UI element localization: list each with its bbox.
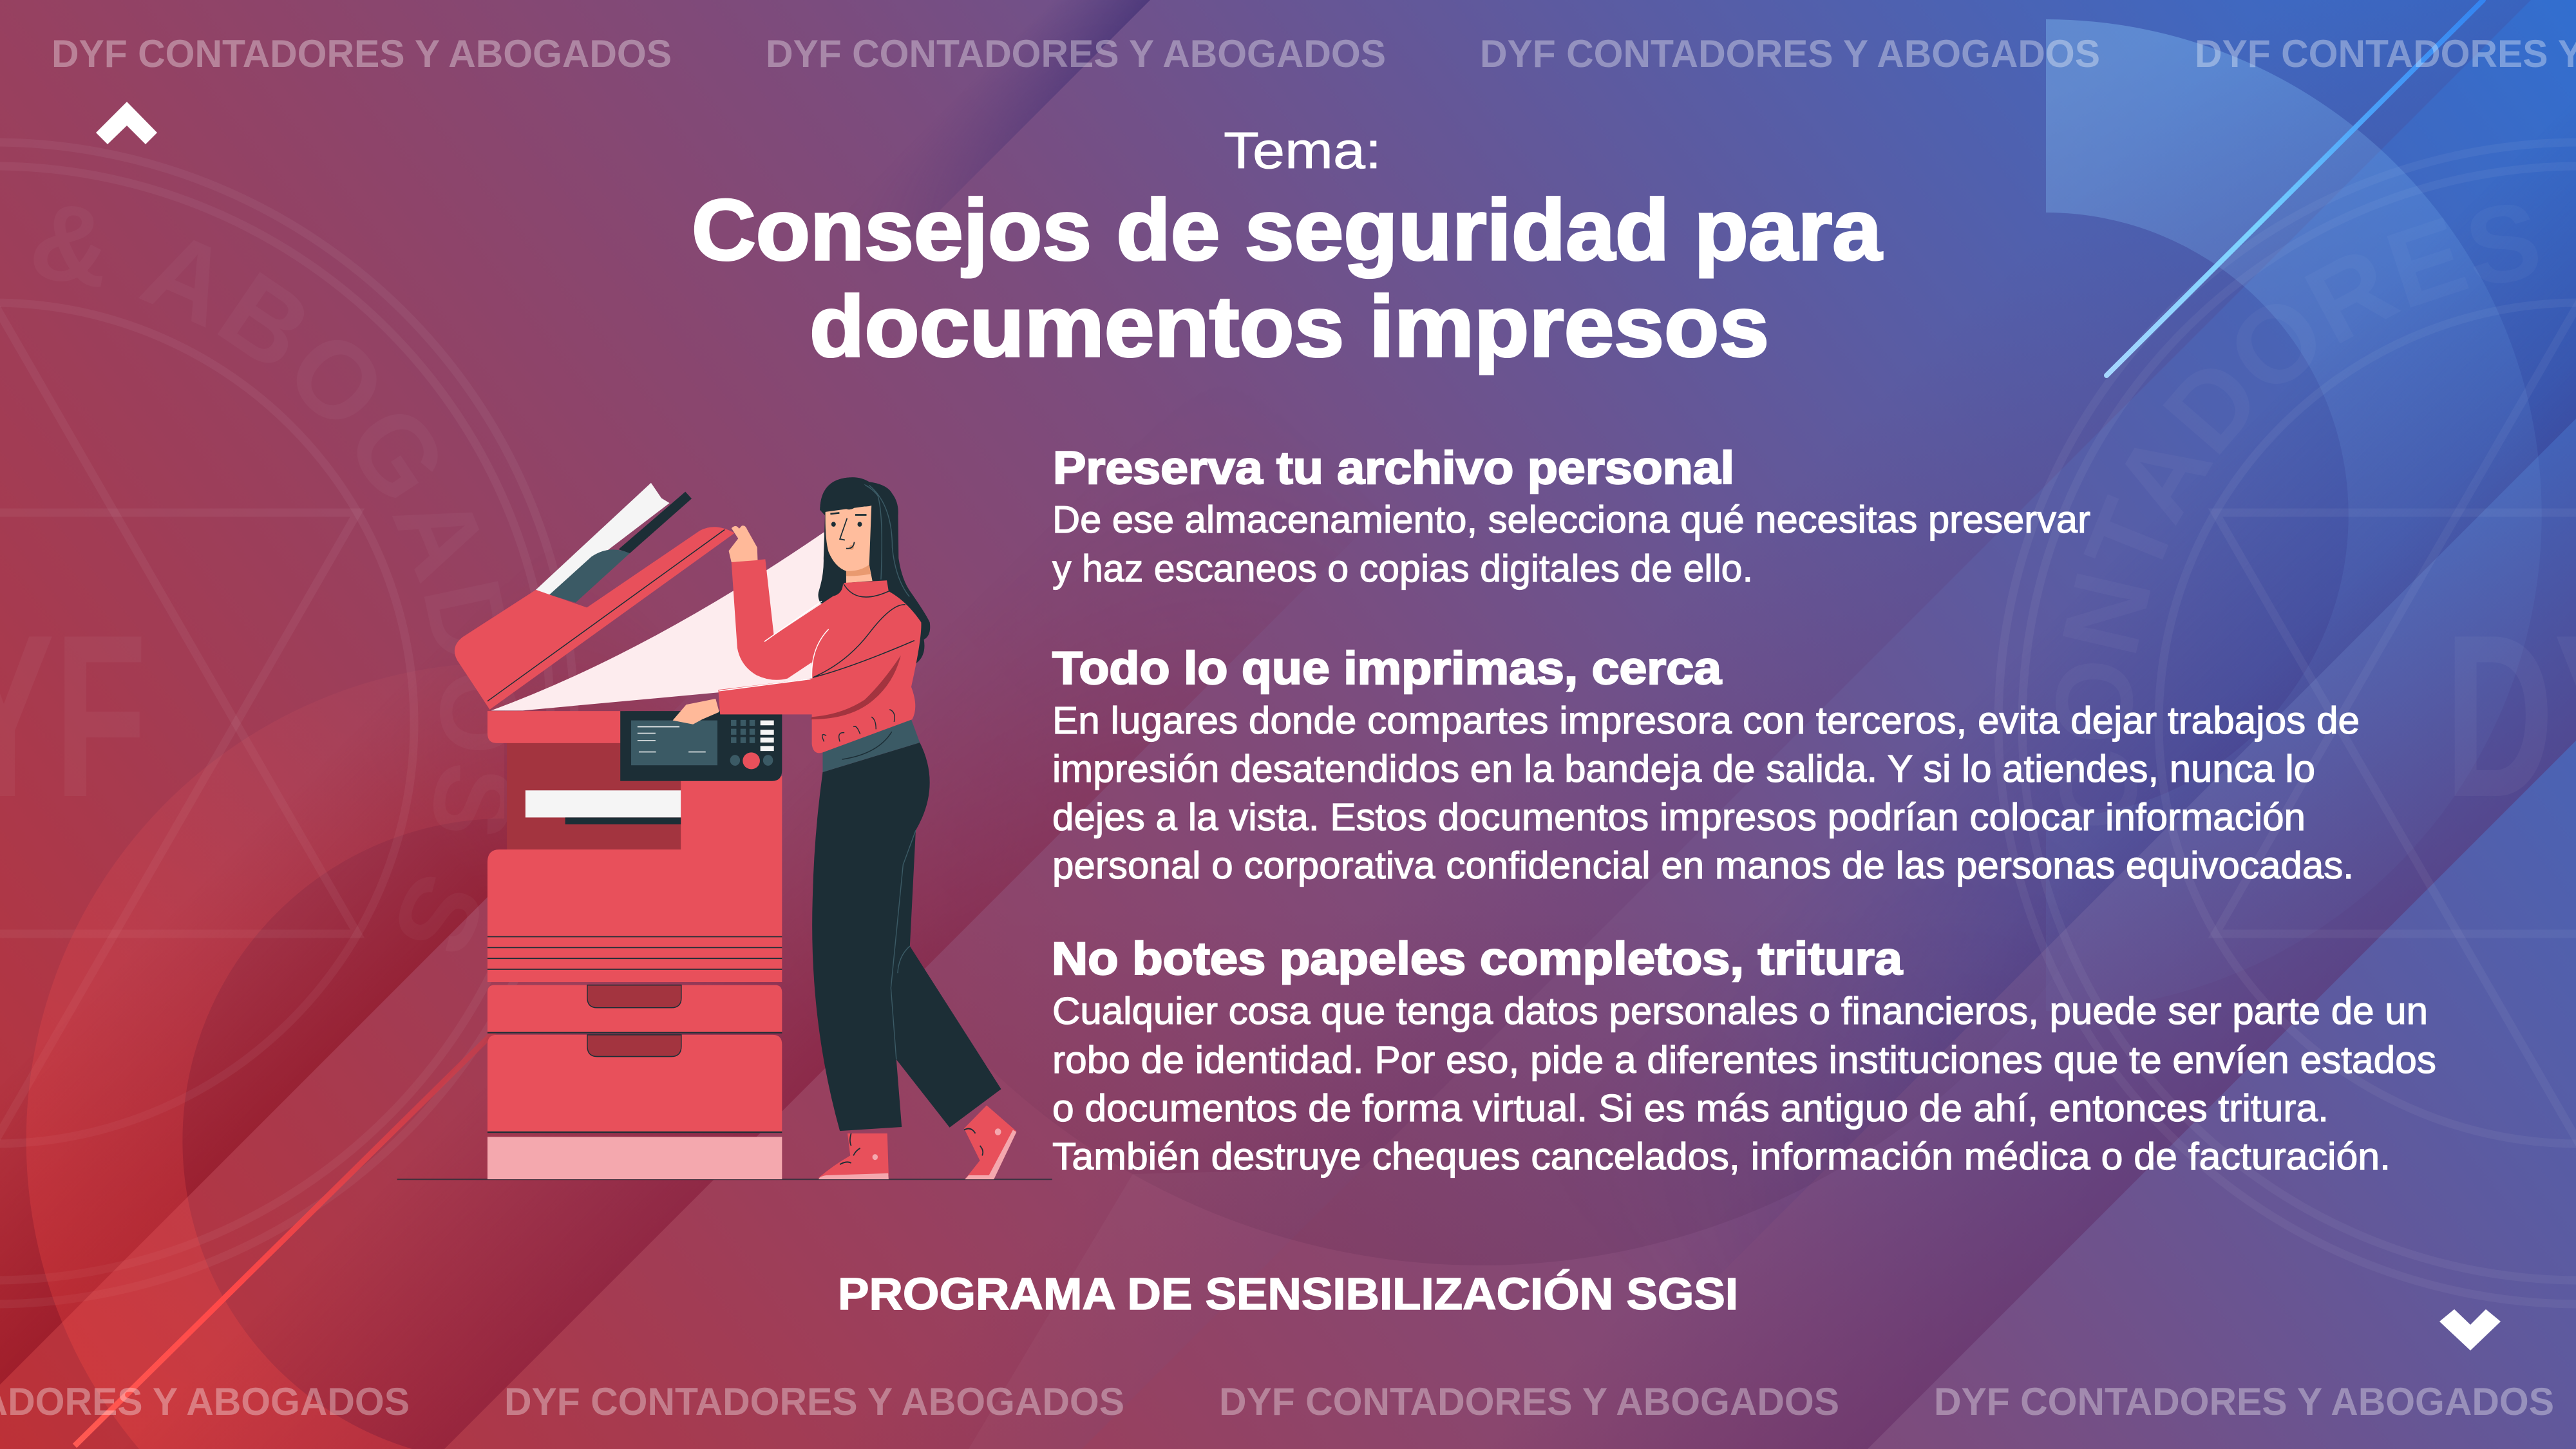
- top marquee: DYF CONTADORES Y ABOGADOS: [766, 32, 1386, 75]
- accent line: blue: [2107, 0, 2483, 375]
- tip 3: [1052, 934, 2436, 1178]
- watermark seal: left: [0, 138, 578, 1309]
- floor line: [397, 1179, 1052, 1180]
- watermark seal: left: & ABOGADOS S: [22, 178, 540, 976]
- tip 2 body: En lugares donde compartes impresora con terceros, evita dejar trabajos de: [1052, 699, 2360, 742]
- tip 2 heading: Todo lo que imprimas, cerca: [1052, 643, 1722, 694]
- bottom marquee: [0, 1380, 2554, 1423]
- tip 3 heading: No botes papeles completos, tritura: [1052, 934, 1903, 985]
- tip 2 body: personal o corporativa confidencial en manos de las personas equivocadas.: [1052, 844, 2354, 887]
- tip 1 heading: Preserva tu archivo personal: [1053, 443, 1734, 494]
- heading label: Tema:: [1224, 122, 1381, 179]
- tip 2 body: dejes a la vista. Estos documentos impresos podrían colocar información: [1052, 796, 2306, 838]
- tip 3 body: o documentos de forma virtual. Si es más antiguo de ahí, entonces tritura.: [1052, 1087, 2329, 1130]
- top marquee: DYF CONTADORES Y ABOGADOS: [1480, 32, 2100, 75]
- tip 1 body: [1052, 498, 2090, 590]
- tip 3 body: Cualquier cosa que tenga datos personales o financieros, puede ser parte de un: [1052, 990, 2428, 1032]
- woman: [673, 477, 1016, 1179]
- watermark seal: right: CONTADORES: [2032, 178, 2549, 838]
- tip 2 body: [1052, 699, 2360, 887]
- accent line: red: [75, 1011, 515, 1446]
- tip 3 body: robo de identidad. Por eso, pide a diferentes instituciones que te envíen estados: [1052, 1039, 2436, 1081]
- footer program label: PROGRAMA DE SENSIBILIZACIÓN SGSI: [838, 1269, 1738, 1319]
- ring: bottom left: [26, 663, 504, 1449]
- tip 3 body: También destruye cheques cancelados, información médica o de facturación.: [1052, 1135, 2391, 1178]
- title: documentos impresos: [810, 279, 1769, 375]
- bottom marquee: DYF CONTADORES Y ABOGADOS: [1219, 1380, 1839, 1423]
- icon: up arrow: [96, 102, 157, 144]
- tip 1: [1052, 443, 2090, 590]
- illustration: woman at photocopier: [397, 477, 1052, 1180]
- tip 2 body: impresión desatendidos en la bandeja de salida. Y si lo atiendes, nunca lo: [1052, 748, 2315, 790]
- top marquee: [52, 32, 2576, 75]
- bottom marquee: DYF CONTADORES Y ABOGADOS: [504, 1380, 1124, 1423]
- tip 3 body: [1052, 990, 2436, 1178]
- tip 1 body: De ese almacenamiento, selecciona qué necesitas preservar: [1052, 498, 2090, 541]
- ring: top right: [2046, 19, 2542, 1011]
- top marquee: DYF CONTADORES Y ABOGADOS: [52, 32, 672, 75]
- scanner lid and document feeder: [455, 483, 735, 710]
- tip 1 body: y haz escaneos o copias digitales de ello.: [1052, 547, 1753, 590]
- icon: down arrow: [2439, 1309, 2501, 1350]
- tip 2: [1052, 643, 2360, 887]
- bottom marquee: DYF CONTADORES Y ABOGADOS: [1934, 1380, 2554, 1423]
- paper beam: [491, 532, 833, 710]
- watermark seal: right: [2003, 138, 2576, 1146]
- title: [692, 182, 1883, 375]
- title: Consejos de seguridad para: [692, 182, 1883, 278]
- photocopier: [488, 711, 782, 1179]
